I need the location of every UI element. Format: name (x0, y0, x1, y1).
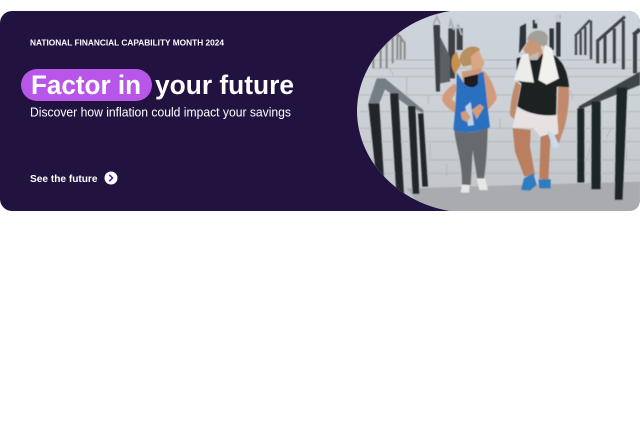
back right railings (519, 23, 526, 53)
headline highlighted words: Factor in (31, 70, 141, 100)
call to action (30, 172, 118, 185)
subheading: Discover how inflation could impact your savings (30, 106, 291, 120)
headline (21, 69, 294, 101)
icon: arrow circle (104, 172, 118, 184)
highlight pill (21, 69, 152, 101)
eyebrow heading: NATIONAL FINANCIAL CAPABILITY MONTH 2024 (30, 38, 225, 48)
front right railing (578, 72, 640, 109)
photo: couple walking up stairs (350, 11, 640, 213)
link label: See the future (30, 173, 98, 185)
banner background (0, 11, 640, 211)
headline remaining words: your future (155, 70, 294, 100)
man (517, 53, 569, 115)
front left railing (368, 78, 423, 113)
far left railing (371, 33, 405, 68)
woman (451, 52, 461, 74)
centre railing (433, 25, 463, 92)
